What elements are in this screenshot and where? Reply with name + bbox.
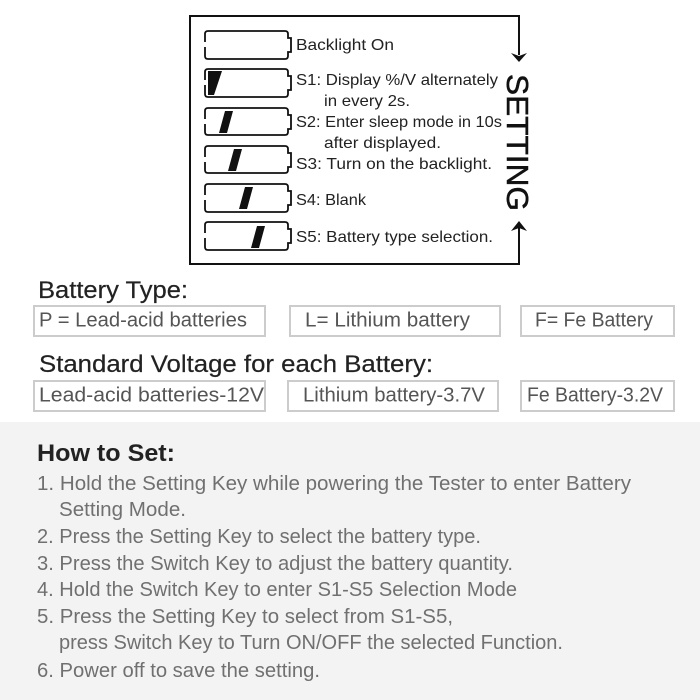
step 5: 5. Press the Setting Key to select from S1-S5,: [37, 606, 453, 628]
box: Fe voltage: Fe Battery-3.2V: [527, 383, 663, 406]
background panel: how to set: [0, 422, 700, 700]
label: S1 continued: in every 2s.: [324, 93, 410, 110]
step 6: 6. Power off to save the setting.: [37, 660, 320, 682]
label: S4: S4: Blank: [296, 192, 367, 209]
step 2: 2. Press the Setting Key to select the battery type.: [37, 526, 481, 548]
box: lithium voltage: [288, 381, 498, 411]
box: lithium voltage: Lithium battery-3.7V: [303, 383, 485, 406]
step 1: Setting Mode.: [59, 499, 186, 521]
battery icon: S5: [205, 222, 291, 250]
step 3: 3. Press the Switch Key to adjust the battery quantity.: [37, 553, 513, 575]
box: Fe type: [521, 306, 674, 336]
box: Fe type: F= Fe Battery: [535, 308, 654, 331]
step 5: [37, 606, 563, 654]
label: S2: S2: Enter sleep mode in 10s: [296, 114, 502, 131]
battery icon: S2: [205, 108, 291, 135]
label: S3: S3: Turn on the backlight.: [296, 156, 492, 173]
vertical heading: setting: SETTING: [500, 74, 535, 211]
label: S1: S1: Display %/V alternately: [296, 72, 498, 89]
battery icon: backlight: [205, 31, 291, 59]
battery icon: S3: [205, 146, 291, 173]
box: lithium type: L= Lithium battery: [305, 308, 471, 331]
step 5: press Switch Key to Turn ON/OFF the selected Function.: [59, 632, 563, 654]
step 1: 1. Hold the Setting Key while powering the Tester to enter Battery: [37, 473, 631, 495]
battery icon: S1: [205, 69, 291, 97]
label: backlight on: Backlight On: [296, 37, 394, 54]
label: S5: S5: Battery type selection.: [296, 229, 493, 246]
heading: battery type: Battery Type:: [38, 277, 188, 304]
setting flow frame with arrows: [190, 16, 527, 264]
box: lead-acid type: P = Lead-acid batteries: [39, 308, 247, 331]
box: lead-acid voltage: Lead-acid batteries-12V: [39, 383, 264, 406]
battery icon: S4: [205, 184, 291, 212]
heading: how to set: How to Set:: [37, 440, 175, 467]
box: lithium type: [290, 306, 500, 336]
step 4: 4. Hold the Switch Key to enter S1-S5 Selection Mode: [37, 579, 517, 601]
label: S2 continued: after displayed.: [324, 135, 441, 152]
step 1: [37, 473, 631, 521]
heading: standard voltage: Standard Voltage for each Battery:: [39, 351, 433, 378]
